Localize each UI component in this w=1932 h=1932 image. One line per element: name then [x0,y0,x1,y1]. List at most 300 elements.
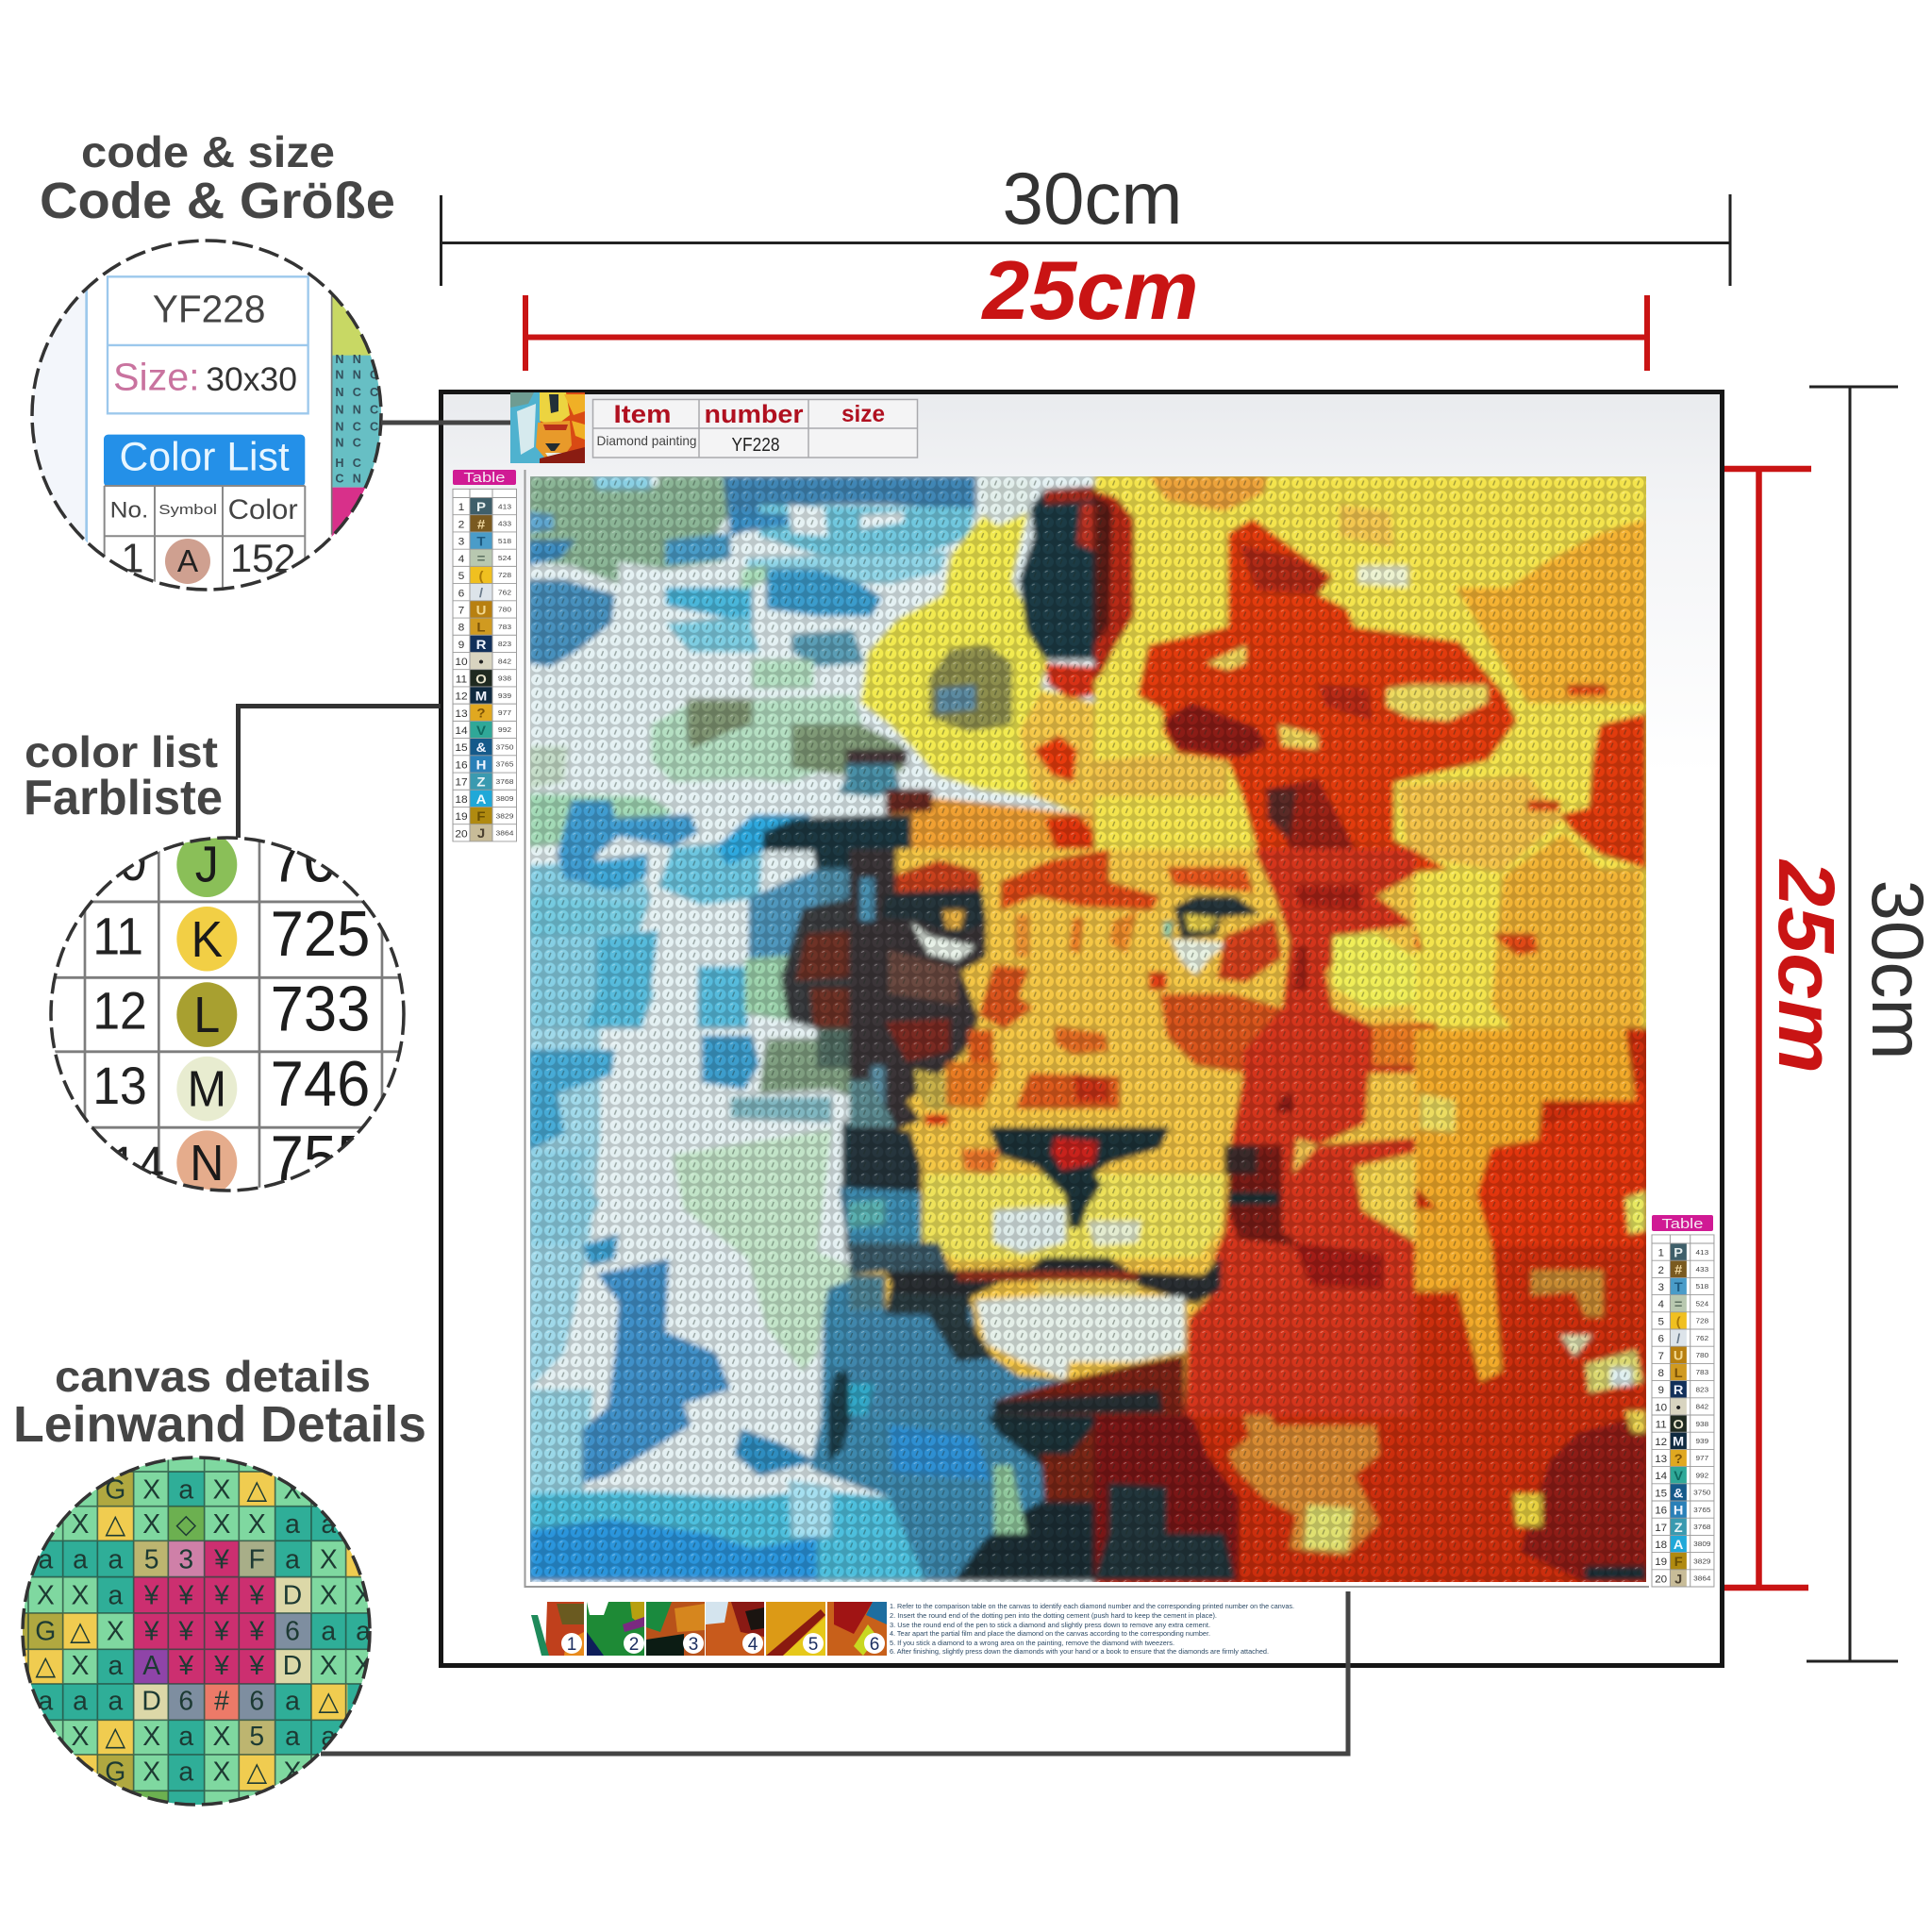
callout circle: canvas symbol grid detail: X [72,1509,90,1540]
callout circle: code and size detail: N [353,473,361,486]
right colour table: U [1674,1348,1683,1363]
right colour table: ( [1676,1314,1681,1328]
thumbnail 6 [827,1602,887,1656]
callout circle: code and size detail: C [370,403,378,416]
callout circle: canvas symbol grid detail: ◇ [175,1509,196,1540]
callout circle: canvas symbol grid detail: a [285,1687,300,1717]
callout circle: canvas symbol grid detail: ¥ [213,1651,229,1681]
callout circle: canvas symbol grid detail: ¥ [248,1581,264,1611]
callout circle: code and size detail: Color [228,494,298,525]
header table: item number size: number [704,400,804,428]
right colour table: M [1673,1434,1684,1449]
right colour table: 16 [1655,1506,1667,1517]
callout circle: canvas symbol grid detail: a [178,1474,193,1505]
right colour table: 728 [1695,1317,1709,1325]
callout circle: canvas symbol grid detail: a [178,1757,193,1787]
callout circle: code and size detail: 1 [121,537,143,582]
right colour table: 9 [1657,1386,1664,1396]
left colour table: O [475,673,487,687]
right colour table: 11 [1656,1420,1667,1431]
heading: code and size: Code & Größe [40,173,395,229]
left colour table: 842 [498,658,512,665]
callout circle: code and size detail: C [370,369,378,382]
callout circle: code and size detail: A [177,544,199,579]
callout circle: code and size detail [31,241,385,591]
header table: item number size: Diamond painting [596,433,696,448]
dimension: 25cm height: 25cm [1762,858,1851,1074]
thumbnail 5 [766,1602,825,1656]
left colour table: 3765 [496,760,514,769]
callout circle: canvas symbol grid detail: X [142,1722,160,1752]
callout circle: code and size detail: C [370,421,378,434]
left colour table: V [476,724,486,739]
right colour table: 12 [1655,1437,1667,1448]
left colour table: 3768 [496,777,514,786]
callout circle: code and size detail: N [335,369,344,382]
left colour table: 10 [455,658,468,668]
callout circle: canvas symbol grid detail: a [108,1581,123,1611]
callout circle: color list detail: M [187,1060,226,1117]
diamond mosaic: lion portrait [528,472,1660,1594]
callout circle: canvas symbol grid detail: ¥ [213,1616,229,1646]
callout circle: canvas symbol grid detail: ¥ [248,1651,264,1681]
right colour table: 19 [1655,1557,1667,1568]
callout circle: code and size detail: 152 [230,536,295,580]
connector: color list to table [238,706,441,838]
callout circle: canvas symbol grid detail: △ [35,1651,56,1681]
left colour table: 728 [498,572,512,579]
right colour table [1652,1215,1714,1587]
right colour table: P [1674,1245,1683,1259]
right colour table: 10 [1655,1403,1667,1413]
callout circle: canvas symbol grid detail: △ [318,1687,339,1717]
thumbnail 2: 2 [629,1635,639,1655]
heading: color list: color list [25,727,218,776]
left colour table: / [479,587,483,601]
callout circle: canvas symbol grid detail: X [213,1722,231,1752]
callout circle: code and size detail: N [335,353,344,366]
callout circle: canvas symbol grid detail: a [108,1545,123,1575]
callout circle: canvas symbol grid detail: a [321,1509,336,1540]
mosaic: lower-right quadrant [1094,1028,1660,1594]
right colour table: 5 [1657,1317,1664,1327]
callout circle: canvas symbol grid detail: a [285,1722,300,1752]
callout circle: canvas symbol grid detail: X [355,1651,373,1681]
right colour table: 15 [1655,1489,1667,1499]
right colour table: 8 [1657,1368,1664,1379]
callout circle: canvas symbol grid detail: X [320,1651,338,1681]
instructions text: 6. After finishing, slightly press down the diamonds with your hand or a book to ensure that the diamonds are firmly attached. [890,1647,1269,1656]
callout circle: color list detail: J [195,836,219,892]
left colour table: J [477,827,485,841]
left colour table: 6 [458,589,464,599]
left colour table: 1 [458,503,464,513]
left colour table: T [476,535,486,549]
callout circle: canvas symbol grid detail: a [356,1616,371,1646]
callout circle: canvas symbol grid detail: A [142,1651,160,1681]
callout circle: color list detail: 733 [271,974,370,1044]
right colour table: 3809 [1693,1540,1711,1548]
callout circle: color list detail: 13 [92,1058,147,1116]
right colour table: J [1674,1572,1682,1586]
callout circle: color list detail: 0 [120,834,146,891]
left colour table: • [478,656,484,670]
left colour table: 518 [498,537,512,545]
heading: code and size [40,127,395,229]
callout circle: canvas symbol grid detail: ¥ [177,1581,193,1611]
connector: code and size to thumbnail [381,421,534,425]
left colour table: 823 [498,640,512,648]
callout circle: canvas symbol grid detail: X [72,1722,90,1752]
left colour table: 14 [455,725,468,737]
canvas border lines [525,470,1649,1587]
right colour table: L [1674,1365,1683,1380]
callout circle: canvas symbol grid detail: X [213,1757,231,1787]
right colour table: ? [1674,1451,1683,1466]
callout circle: code and size detail: C [353,457,361,470]
left colour table: & [476,741,486,756]
callout circle: code and size detail: H [335,457,344,470]
callout circle: color list detail: K [192,911,223,968]
callout circle: color list detail: 755 [271,1123,370,1194]
callout circle: code and size detail: C [353,436,361,449]
right colour table: V [1674,1469,1684,1483]
callout circle: canvas symbol grid detail: ¥ [213,1581,229,1611]
left colour table: 13 [455,708,468,720]
right colour table: R [1674,1383,1683,1397]
left colour table: M [475,690,487,704]
callout circle: color list detail [49,836,406,1192]
callout circle: canvas symbol grid detail: G [35,1616,56,1646]
right colour table: 783 [1695,1368,1709,1376]
heading: color list: Farbliste [24,771,223,825]
callout circle: canvas symbol grid detail: X [107,1616,125,1646]
callout circle: canvas symbol grid detail: a [285,1509,300,1540]
callout circle: canvas symbol grid detail: X [213,1509,231,1540]
callout circle: canvas symbol grid detail: a [38,1545,53,1575]
callout circle: canvas symbol grid detail: ¥ [213,1545,229,1575]
callout circle: code and size detail: N [335,436,344,449]
right colour table: 413 [1695,1248,1709,1257]
table title: Table [1662,1216,1704,1232]
right colour table: 518 [1695,1282,1709,1291]
connector: canvas details to bottom of canvas [321,1591,1348,1754]
callout circle: canvas symbol grid detail: 3 [178,1545,193,1575]
callout circle: canvas symbol grid detail: X [248,1509,266,1540]
left colour table: 16 [455,760,468,771]
callout circle: code and size detail: 30x30 [206,361,297,398]
left colour table: 4 [458,554,465,565]
right colour table: 977 [1695,1454,1709,1462]
right colour table: 18 [1655,1540,1667,1551]
callout circle: canvas symbol grid detail: △ [105,1722,125,1752]
right colour table: 938 [1695,1420,1709,1428]
callout circle: canvas symbol grid detail: ¥ [248,1616,264,1646]
left colour table: ( [479,570,484,584]
mosaic: upper-left quadrant [528,472,1094,1038]
thumbnail 1: 1 [567,1635,576,1655]
callout circle: canvas symbol grid detail: ¥ [143,1581,159,1611]
mosaic: lion face centre [849,849,1415,1415]
callout circle: color list detail: 725 [271,898,370,970]
right colour table: # [1674,1262,1682,1277]
thumbnail 4: 4 [748,1635,758,1655]
callout circle: canvas symbol grid detail: a [321,1616,336,1646]
left colour table: R [476,638,487,653]
callout circle: code and size detail: N [335,386,344,399]
callout circle: color list detail: 70 [271,824,337,895]
heading: canvas details [13,1352,426,1453]
callout circle: canvas symbol grid detail: X [142,1474,160,1505]
left colour table: 9 [458,640,464,651]
right colour table: • [1676,1400,1681,1414]
left colour table: 15 [455,743,468,754]
heading: canvas details: Leinwand Details [13,1396,426,1453]
callout circle: canvas symbol grid detail: X [284,1757,302,1787]
callout circle: canvas symbol grid detail: X [142,1757,160,1787]
callout circle: code and size detail: N [353,353,361,366]
callout circle: canvas symbol grid detail: X [213,1474,231,1505]
left colour table: 3 [458,537,464,547]
callout circle: code and size detail: N [353,403,361,416]
callout circle: color list detail: 11 [92,908,143,966]
callout circle: canvas symbol grid detail: a [73,1687,88,1717]
right colour table: = [1674,1297,1682,1311]
left colour table: F [476,810,486,824]
callout circle: color list detail: 12 [92,983,147,1041]
thumbnail 3: 3 [689,1635,698,1655]
callout circle: canvas symbol grid detail: a [73,1545,88,1575]
right colour table: 433 [1695,1265,1709,1274]
right colour table: T [1674,1279,1683,1294]
callout circle: code and size detail: N [353,369,361,382]
dimension: 30cm height [1807,387,1932,1661]
left colour table: A [476,792,486,808]
right colour table: 524 [1695,1300,1709,1307]
instructions text: 4. Tear apart the partial film and place the diamond on the canvas according to the corresponding number. [890,1629,1210,1638]
callout circle: canvas symbol grid detail: a [321,1722,336,1752]
left colour table: 762 [498,589,512,596]
left colour table: L [476,621,486,635]
callout circle: code and size detail: Size: [113,355,200,398]
header table: item number size: YF228 [732,435,779,456]
callout circle: canvas symbol grid detail: 6 [178,1687,193,1717]
callout circle: canvas symbol grid detail: X [284,1474,302,1505]
heading: canvas details: canvas details [55,1352,371,1401]
callout circle: canvas symbol grid detail: a [285,1545,300,1575]
callout circle: code and size detail: C [335,473,344,486]
heading: code and size: code & size [81,127,335,176]
callout circle: canvas symbol grid detail: ¥ [177,1651,193,1681]
callout circle: canvas symbol grid detail: ¥ [177,1616,193,1646]
header table: item number size [592,400,917,458]
right colour table: 17 [1655,1523,1667,1534]
right colour table: 762 [1695,1334,1709,1342]
right colour table: Z [1674,1520,1683,1535]
callout circle: canvas symbol grid detail: X [37,1581,55,1611]
callout circle: code and size detail: Color List [120,434,290,479]
callout circle: canvas symbol grid detail: G [105,1757,125,1787]
instructions text: 3. Use the round end of the pen to stick a diamond and slightly press down to remove any extra cement. [890,1621,1210,1629]
callout circle: canvas symbol grid detail: △ [246,1757,267,1787]
callout circle: code and size detail: Symbol [158,503,217,518]
dimension: 30cm width [441,157,1730,286]
left colour table: 783 [498,623,512,631]
left colour table: 2 [458,520,464,530]
callout circle: canvas symbol grid detail: # [214,1687,229,1717]
right colour table: 14 [1655,1472,1667,1482]
callout circle: color list detail: N [190,1135,224,1191]
left colour table: 992 [498,726,512,734]
right colour table: / [1676,1331,1680,1345]
callout circle: canvas symbol grid detail: △ [105,1509,125,1540]
instruction thumbnails 1 to 6 [525,1602,887,1656]
right colour table: 20 [1655,1574,1667,1585]
left colour table: 3809 [496,794,514,803]
right colour table: 3765 [1693,1506,1711,1514]
callout circle: canvas symbol grid detail: △ [246,1474,267,1505]
dimension: 25cm width: 25cm [980,243,1198,337]
left colour table: H [476,758,486,773]
header table: item number size: size [841,401,885,427]
right colour table: 3750 [1693,1489,1711,1497]
table title [1652,1215,1713,1232]
callout circle: code and size detail: C [370,386,378,399]
callout circle: canvas symbol grid detail: X [355,1581,373,1611]
mosaic: lower-left quadrant [528,1028,1094,1594]
callout circle: canvas symbol grid detail: X [320,1545,338,1575]
right colour table: 842 [1695,1403,1709,1411]
callout circle: canvas symbol grid detail: 6 [285,1616,300,1646]
heading: color list [24,727,223,825]
dimension: 30cm width: 30cm [1002,157,1183,240]
left colour table: 433 [498,520,512,527]
right colour table: 823 [1695,1386,1709,1393]
left colour table: 524 [498,554,512,562]
right colour table: 3 [1657,1282,1664,1293]
callout circle: code and size detail: C [353,421,361,434]
right colour table: 13 [1655,1454,1667,1465]
left colour table: 780 [498,606,512,614]
left colour table [453,470,517,841]
right colour table: 2 [1657,1265,1664,1276]
table title: Table [464,470,506,486]
left colour table: Z [476,775,486,790]
instructions text [890,1602,1294,1656]
left colour table: 5 [458,571,464,582]
right colour table: 3829 [1693,1557,1711,1565]
thumbnail 2 [587,1602,644,1656]
callout circle: canvas symbol grid detail: X [72,1651,90,1681]
callout circle: canvas symbol grid detail: D [142,1687,161,1717]
right colour table: 939 [1695,1437,1709,1445]
left colour table: ? [476,707,486,722]
right colour table: 3864 [1693,1574,1711,1583]
header table: item number size: Item [613,400,672,428]
callout circle: code and size detail: No. [110,497,148,523]
dimension: 25cm height [1724,469,1851,1588]
callout circle: canvas symbol grid detail: 6 [249,1687,264,1717]
callout circle: canvas symbol grid detail: 5 [249,1722,264,1752]
right colour table: 7 [1657,1351,1664,1362]
left colour table: 939 [498,691,512,700]
left colour table: = [477,552,485,567]
left colour table: 3750 [496,743,514,751]
left colour table: 7 [458,606,464,616]
callout circle: canvas symbol grid detail: G [105,1474,125,1505]
right colour table: O [1673,1417,1684,1431]
callout circle: canvas symbol grid detail [21,1456,372,1807]
panel: canvas frame [441,392,1723,1666]
callout circle: canvas symbol grid detail: X [142,1509,160,1540]
callout circle: canvas symbol grid detail: a [178,1722,193,1752]
callout circle: code and size detail: N [335,403,344,416]
right colour table: 1 [1657,1248,1664,1259]
bead texture overlay [530,476,1646,1582]
left colour table: 12 [455,691,468,702]
right colour table: A [1674,1537,1683,1552]
thumbnail 5: 5 [808,1635,818,1655]
left colour table: 18 [455,794,468,806]
callout circle: canvas symbol grid detail: ¥ [143,1616,159,1646]
left colour table: 17 [455,777,468,789]
right colour table: 992 [1695,1472,1709,1479]
callout circle: color list detail: 14 [110,1137,164,1194]
callout circle: canvas symbol grid detail: a [108,1687,123,1717]
instructions text: 2. Insert the round end of the dotting pen into the dotting cement (push hard to keep the cement in place). [890,1611,1217,1620]
right colour table: 4 [1657,1300,1664,1310]
left colour table: U [476,604,486,618]
left colour table: 8 [458,623,464,634]
left colour table: 11 [456,675,467,685]
callout circle: code and size detail: YF228 [153,288,266,331]
callout circle: canvas symbol grid detail: △ [70,1616,91,1646]
callout circle: canvas symbol grid detail: a [38,1687,53,1717]
right colour table: 6 [1657,1334,1664,1345]
dimension: 25cm width [525,243,1647,371]
callout circle: code and size detail: N [335,421,344,434]
callout circle: canvas symbol grid detail: X [320,1581,338,1611]
right colour table: & [1674,1486,1683,1500]
left colour table: # [477,518,485,532]
left colour table: 19 [455,812,468,823]
callout circle: canvas symbol grid detail: F [249,1545,265,1575]
callout circle: code and size detail: C [353,386,361,399]
mosaic: upper-right quadrant [1094,472,1660,1038]
callout circle: canvas symbol grid detail: X [72,1581,90,1611]
left colour table: 3864 [496,829,514,837]
callout circle: canvas symbol grid detail: D [283,1651,302,1681]
left colour table: P [476,501,486,515]
callout circle: color list detail: L [193,987,220,1043]
instructions text: 5. If you stick a diamond to a wrong area on the painting, remove the diamond with tweezers. [890,1639,1174,1647]
left colour table: 3829 [496,812,514,820]
right colour table: H [1674,1503,1683,1517]
instructions text: 1. Refer to the comparison table on the canvas to identify each diamond number and the corresponding printed number on the canvas. [890,1602,1294,1610]
thumbnail 1 [525,1602,584,1656]
callout circle: canvas symbol grid detail: 5 [144,1545,159,1575]
left colour table: 413 [498,503,512,510]
right colour table: 3768 [1693,1523,1711,1531]
thumbnail 3 [646,1602,705,1656]
left colour table: 977 [498,708,512,717]
right colour table: F [1674,1555,1683,1569]
callout circle: canvas symbol grid detail: D [283,1581,302,1611]
left colour table: 938 [498,675,512,682]
callout circle: canvas symbol grid detail: a [108,1651,123,1681]
left colour table: 20 [455,829,468,840]
product thumbnail: lion [510,392,585,463]
